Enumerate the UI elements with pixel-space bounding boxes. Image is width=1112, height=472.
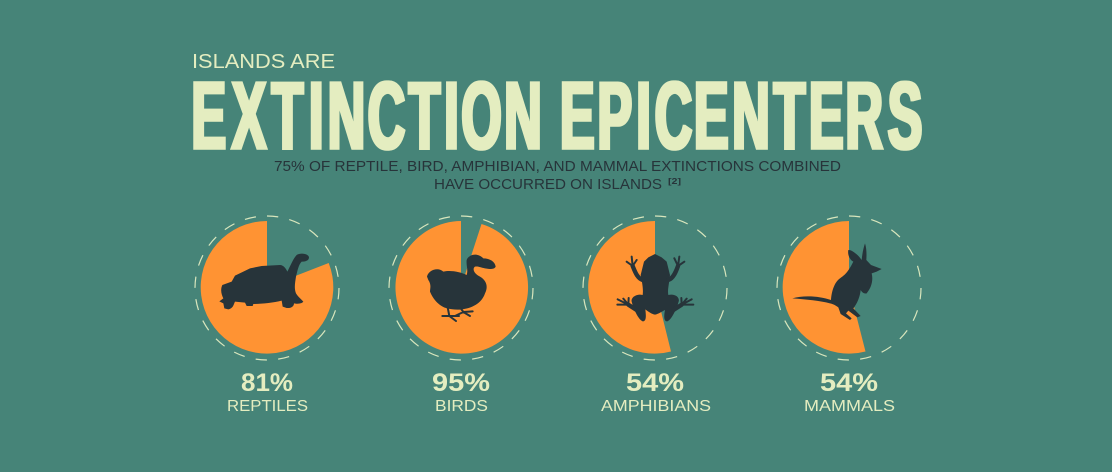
title bbox=[191, 63, 922, 170]
panel: mammals bbox=[777, 216, 921, 415]
panel: reptiles bbox=[195, 216, 339, 415]
subtitle bbox=[274, 158, 841, 193]
label: mammals: MAMMALS bbox=[804, 398, 895, 415]
subtitle: 75% OF REPTILE, BIRD, AMPHIBIAN, AND MAMMAL EXTINCTIONS COMBINED bbox=[274, 158, 841, 175]
icon: tortoise bbox=[219, 254, 309, 309]
panel: birds bbox=[389, 216, 533, 415]
label: reptiles: REPTILES bbox=[227, 398, 308, 415]
kicker: islands are: ISLANDS ARE bbox=[192, 51, 335, 73]
icon: dodo bbox=[427, 255, 496, 321]
pie: amphibians 54% bbox=[588, 221, 671, 354]
icon: bilby bbox=[792, 243, 882, 320]
subtitle: HAVE OCCURRED ON ISLANDS bbox=[434, 176, 662, 193]
dashed ring: reptiles bbox=[195, 216, 339, 360]
value: 54%: 54% bbox=[626, 369, 684, 397]
pie: birds 95% bbox=[395, 221, 528, 354]
dashed ring: mammals bbox=[777, 216, 921, 360]
label: amphibians: AMPHIBIANS bbox=[601, 398, 711, 415]
dashed ring: amphibians bbox=[583, 216, 727, 360]
label: birds: BIRDS bbox=[435, 398, 488, 415]
title: EXTINCTION bbox=[191, 63, 542, 170]
value: 95%: 95% bbox=[432, 369, 490, 397]
subtitle: [2] bbox=[668, 177, 681, 186]
value: 54%: 54% bbox=[820, 369, 878, 397]
pie: reptiles 81% bbox=[201, 221, 333, 354]
icon: frog bbox=[617, 254, 693, 321]
pie: mammals 54% bbox=[783, 221, 866, 354]
panel: amphibians bbox=[583, 216, 727, 415]
title: EPICENTERS bbox=[560, 63, 922, 170]
value: 81%: 81% bbox=[241, 369, 293, 397]
dashed ring: birds bbox=[389, 216, 533, 360]
